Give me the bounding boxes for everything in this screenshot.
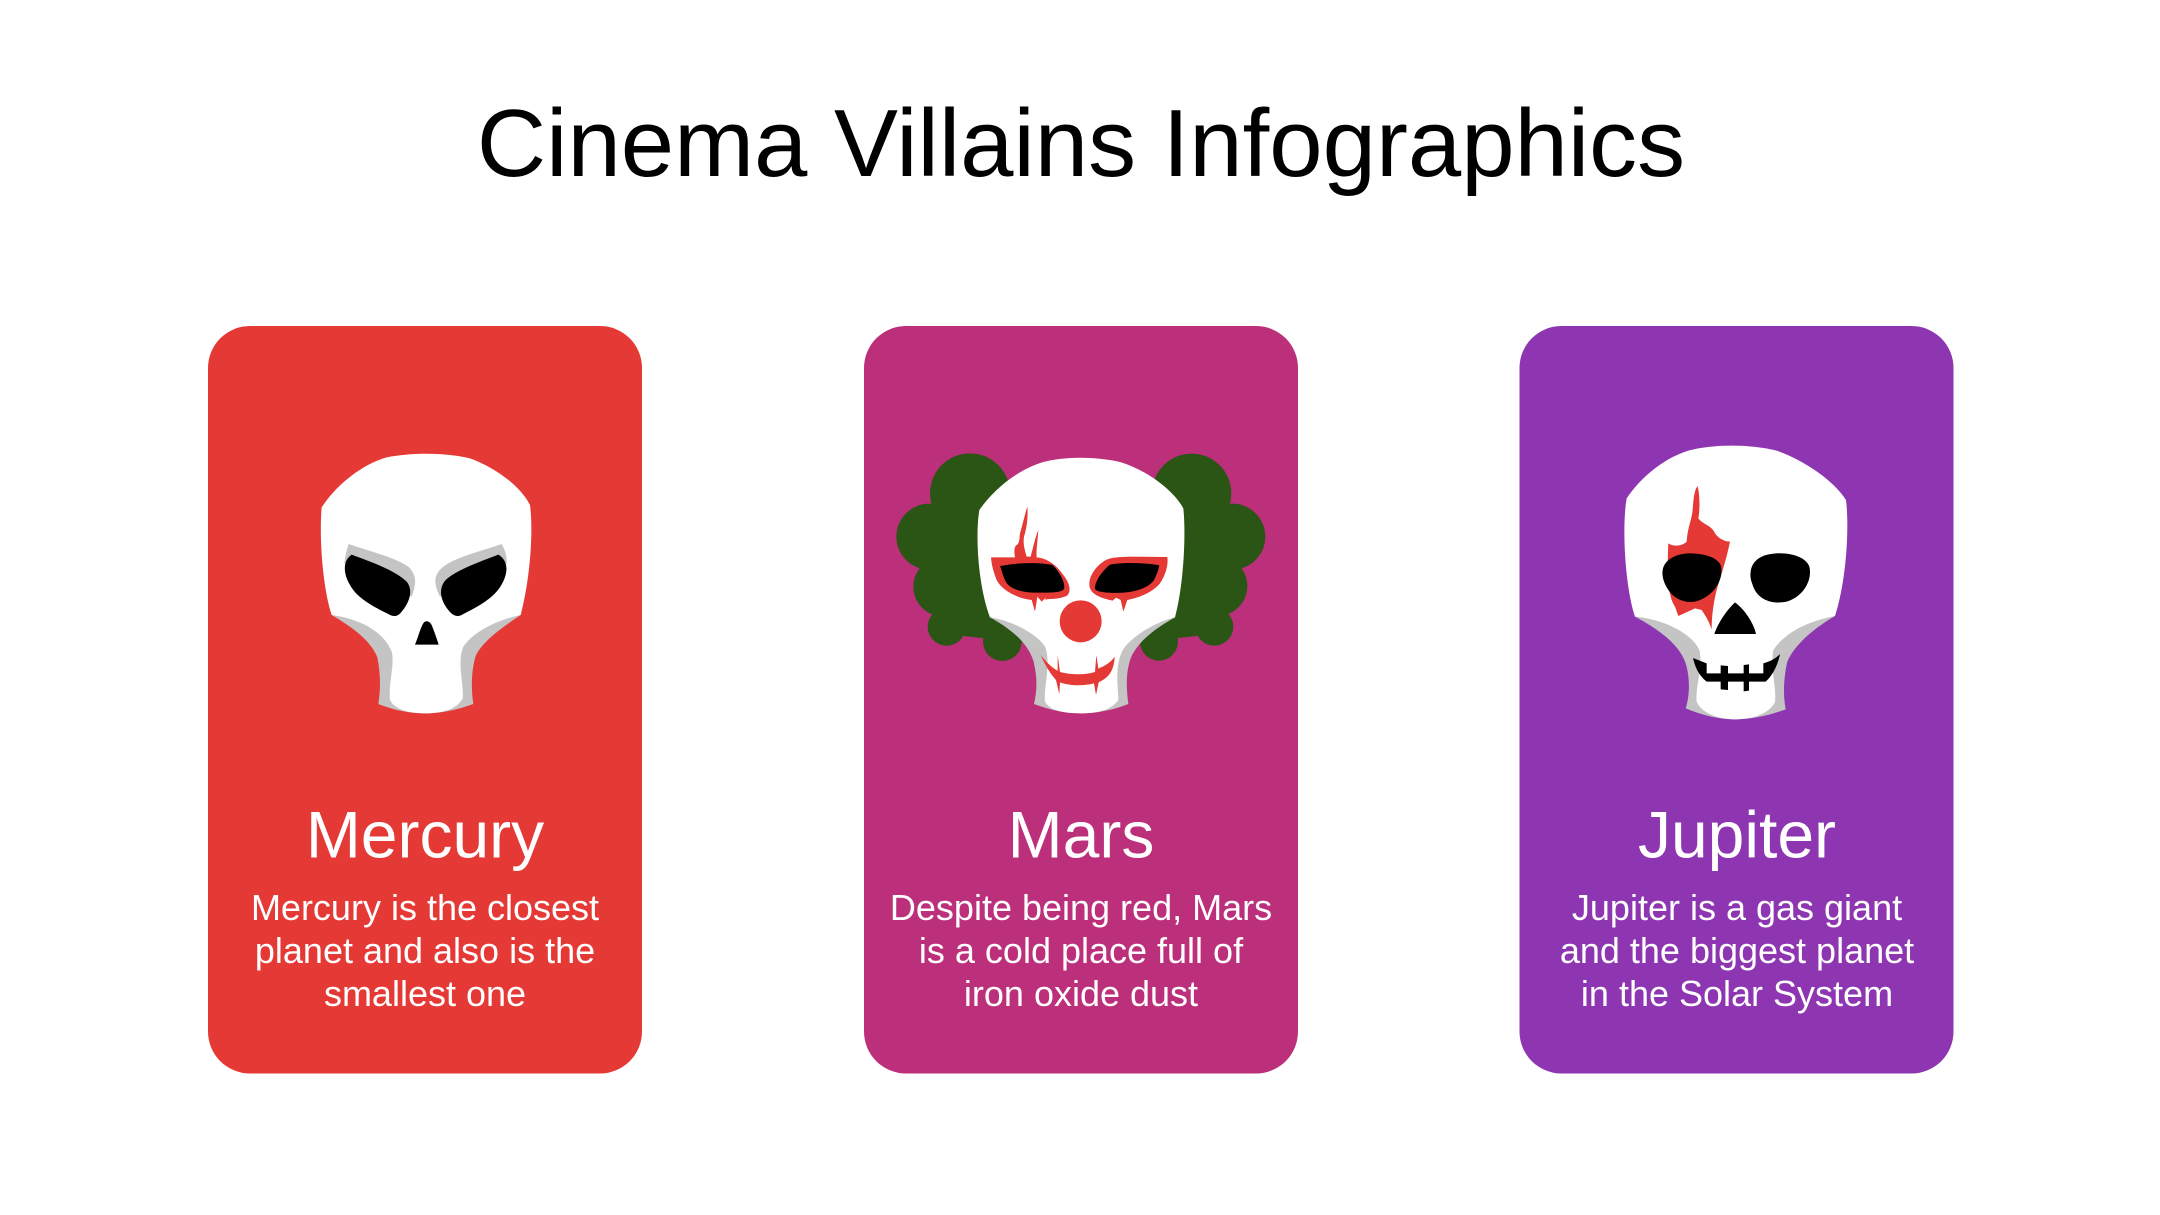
text: Mercury description: smallest one — [324, 973, 526, 1014]
panel background: Mars — [864, 326, 1298, 1074]
text: Jupiter description: in the Solar System — [1581, 973, 1893, 1014]
text: Mars description: is a cold place full of — [919, 930, 1244, 971]
icon: clown skull — [896, 453, 1265, 713]
text: Mars description: Despite being red, Mars — [890, 887, 1272, 928]
text: Mercury description: Mercury is the closest — [251, 887, 599, 928]
panel: Mars — [864, 326, 1298, 1074]
heading: Mars: Mars — [1008, 798, 1154, 872]
icon: alien skull — [321, 454, 531, 713]
panel: Mercury — [208, 326, 642, 1074]
icon: scarred skull — [1624, 446, 1847, 719]
text: Jupiter description: Jupiter is a gas giant — [1572, 887, 1902, 928]
text: Mercury description: planet and also is the — [255, 930, 595, 971]
panel background: Jupiter — [1520, 326, 1954, 1074]
text: Mars description: iron oxide dust — [964, 973, 1198, 1014]
text: Jupiter description: and the biggest planet — [1560, 930, 1914, 971]
panel: Jupiter — [1520, 326, 1954, 1074]
heading: Jupiter: Jupiter — [1638, 798, 1836, 872]
title: Cinema Villains Infographics — [477, 90, 1685, 197]
heading: Mercury: Mercury — [306, 798, 544, 872]
panel background: Mercury — [208, 326, 642, 1074]
